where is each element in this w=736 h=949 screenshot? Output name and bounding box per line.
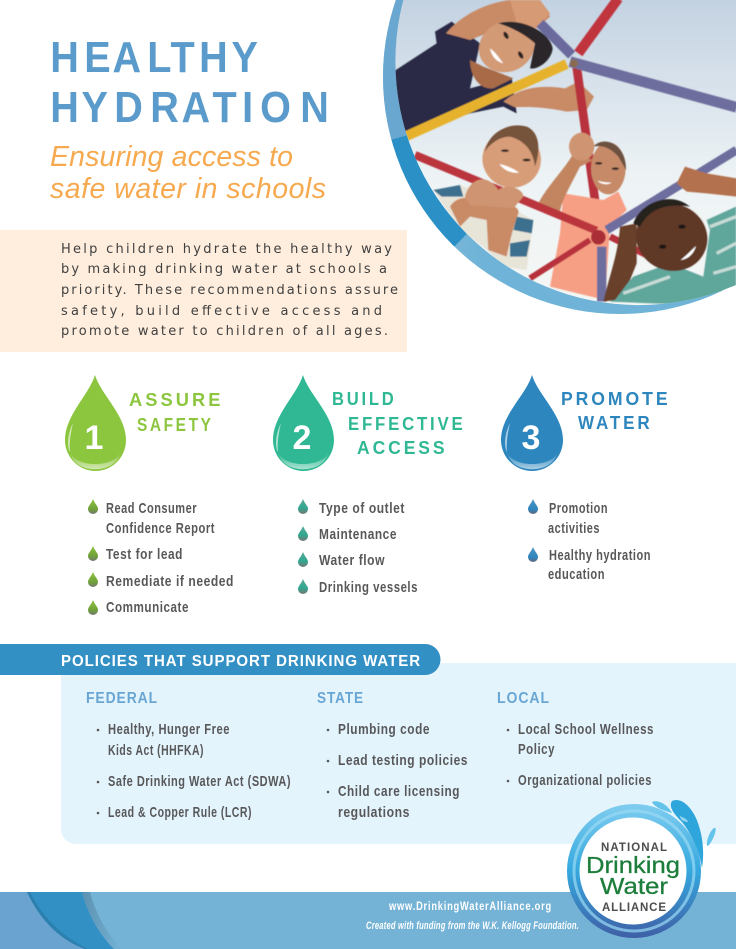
bullet list: promote water: education xyxy=(548,566,605,583)
federal column: Safe Drinking Water Act (SDWA) xyxy=(108,773,291,790)
bullet list: build effective access: Type of outlet xyxy=(319,500,405,517)
bullet list: assure safety: Test for lead xyxy=(106,546,183,563)
icon: green drop 1: 1 xyxy=(85,419,103,457)
logo wordmark: Water xyxy=(600,873,668,899)
bullet list: build effective access: Maintenance xyxy=(319,526,397,543)
girl in coral dress xyxy=(550,192,627,300)
intro text panel: Help children hydrate the healthy way xyxy=(61,242,392,257)
federal column xyxy=(86,690,291,821)
state column: STATE xyxy=(317,690,364,707)
icon: blue drop 3 xyxy=(501,375,563,471)
funding credit: Created with funding from the W.K. Kellogg Foundation. xyxy=(366,920,579,932)
icon: teal drop 2: 2 xyxy=(293,419,311,457)
panel: 1 assure safety xyxy=(65,375,234,616)
heading: promote water: PROMOTE xyxy=(561,389,670,409)
blue crescent ring xyxy=(383,0,726,314)
intro text panel: by making drinking water at schools a xyxy=(61,262,387,277)
intro text panel: promote water to children of all ages. xyxy=(61,324,388,339)
icon: blue drop 3: 3 xyxy=(522,419,540,457)
bullet list: assure safety: Remediate if needed xyxy=(106,573,234,590)
heading: build effective access: BUILD xyxy=(332,389,396,409)
logo wordmark: NATIONAL xyxy=(601,842,667,854)
boy 2 striped shirt and face xyxy=(433,185,533,270)
boy 3 plaid shirt and face xyxy=(610,207,736,307)
title xyxy=(50,32,329,131)
boy 1 shirt and arms xyxy=(390,22,517,133)
state column: Plumbing code xyxy=(338,721,430,738)
policies banner: POLICIES THAT SUPPORT DRINKING WATER xyxy=(61,653,421,670)
state column xyxy=(317,690,468,821)
policies banner xyxy=(0,644,440,675)
panel: 3 promote water xyxy=(501,375,670,583)
footer band xyxy=(0,892,736,949)
state column: Child care licensing xyxy=(338,783,460,800)
icon: teal drop 2 xyxy=(273,375,334,471)
intro text panel: priority. These recommendations assure xyxy=(61,283,398,298)
local column: Organizational policies xyxy=(518,772,652,789)
heading: promote water: WATER xyxy=(578,413,652,433)
local column: Local School Wellness xyxy=(518,721,654,738)
red and purple lower bars xyxy=(530,240,590,278)
state column: regulations xyxy=(338,804,410,821)
logo wordmark: ALLIANCE xyxy=(602,902,666,914)
intro text panel: safety, build effective access and xyxy=(61,304,382,319)
local column: Policy xyxy=(518,741,555,758)
bullet list: assure safety xyxy=(88,499,234,616)
subtitle xyxy=(50,141,326,205)
bullet list: build effective access: Drinking vessels xyxy=(319,579,418,596)
bullet list: promote water: Promotion xyxy=(549,500,608,517)
bullet list: assure safety: Communicate xyxy=(106,599,189,616)
title: HEALTHY xyxy=(50,32,258,81)
federal column: FEDERAL xyxy=(86,690,158,707)
local column xyxy=(497,690,654,789)
logo wordmark xyxy=(586,842,680,914)
logo: National Drinking Water Alliance xyxy=(567,800,716,938)
icon: green drop 1 xyxy=(65,375,126,471)
bullet list: build effective access: Water flow xyxy=(319,552,385,569)
subtitle: Ensuring access to xyxy=(50,141,293,173)
federal column: Kids Act (HHFKA) xyxy=(108,742,204,759)
federal column: Healthy, Hunger Free xyxy=(108,721,230,738)
bullet list: promote water xyxy=(528,499,651,583)
panel: policies xyxy=(0,644,736,844)
logo wordmark: Drinking xyxy=(586,852,680,878)
bullet list: assure safety: Confidence Report xyxy=(106,520,215,537)
heading: assure safety xyxy=(129,390,224,435)
heading: build effective access: ACCESS xyxy=(357,438,448,458)
website url: www.DrinkingWaterAlliance.org xyxy=(388,899,552,913)
heading: assure safety: ASSURE xyxy=(129,390,224,410)
climbing bars xyxy=(578,0,618,53)
subtitle: safe water in schools xyxy=(50,173,326,205)
heading: build effective access xyxy=(332,389,466,458)
panel: 2 build effective access xyxy=(273,375,466,596)
heading: assure safety: SAFETY xyxy=(137,415,214,435)
heading: promote water xyxy=(561,389,670,433)
local column: LOCAL xyxy=(497,690,550,707)
federal column: Lead & Copper Rule (LCR) xyxy=(108,804,252,821)
title: HYDRATION xyxy=(50,82,329,131)
state column: Lead testing policies xyxy=(338,752,468,769)
bullet list: promote water: activities xyxy=(548,520,600,537)
bullet list: build effective access xyxy=(298,499,418,596)
bullet list: promote water: Healthy hydration xyxy=(549,547,651,564)
intro text panel xyxy=(0,230,407,352)
hero photo: children on a climbing frame xyxy=(383,0,736,314)
bullet list: assure safety: Read Consumer xyxy=(106,500,197,517)
heading: build effective access: EFFECTIVE xyxy=(348,414,466,434)
icon: water splash xyxy=(652,800,716,868)
